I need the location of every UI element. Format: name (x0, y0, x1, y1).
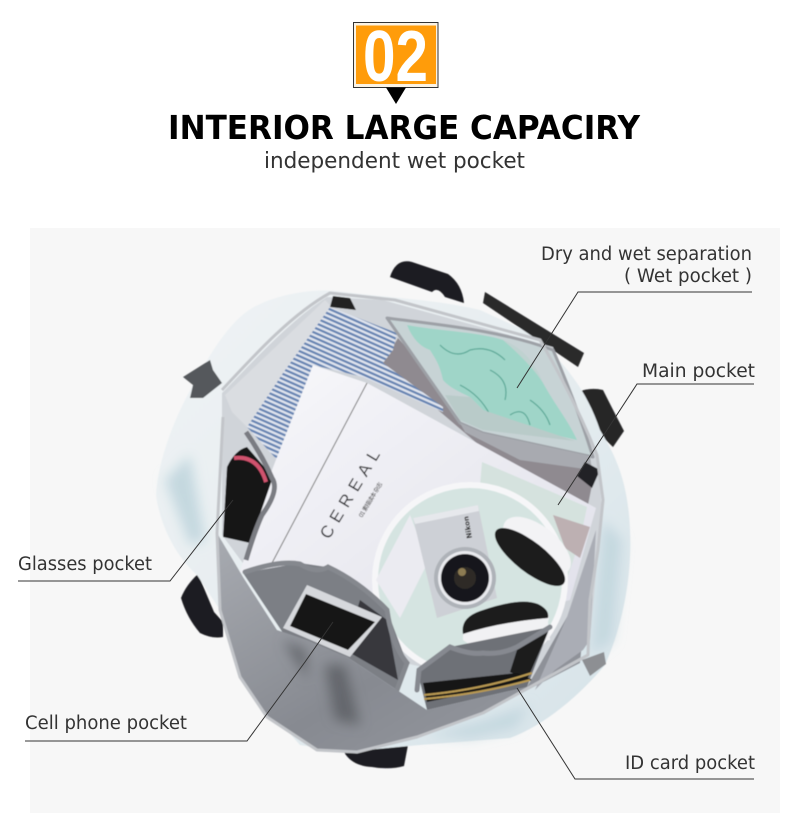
lining highlight (225, 300, 335, 428)
badge: section number 02: 02 (363, 17, 428, 97)
magazine: CEREAL (240, 365, 596, 640)
title: INTERIOR LARGE CAPACIRY (168, 109, 640, 147)
ID card pocket (417, 627, 550, 710)
label: cell phone pocket: Cell phone pocket (25, 713, 187, 734)
handle: left (181, 574, 223, 638)
bag inner lining (222, 297, 602, 690)
flap shadows (283, 640, 360, 725)
panel: photo background (30, 228, 780, 813)
zippers (217, 293, 603, 752)
right lining (535, 530, 596, 690)
dark gap at top (330, 296, 356, 310)
wet pocket lower lip (460, 423, 592, 470)
leader: main pocket (558, 384, 754, 505)
strap: right top (483, 292, 584, 367)
towel prints (440, 345, 550, 425)
wet pocket: pale window (503, 340, 577, 440)
bag photo illustration (156, 261, 630, 768)
headphones: upper ear cup (487, 506, 581, 595)
label: glasses pocket: Glasses pocket (18, 554, 152, 575)
label: main pocket: Main pocket (642, 361, 755, 382)
camera (413, 505, 497, 618)
leader: glasses pocket (18, 500, 233, 581)
zipper pull: right bottom (582, 652, 606, 676)
label: wet pocket: ( Wet pocket ) (624, 266, 752, 287)
phone (283, 585, 382, 657)
wet pocket: zipper pull (577, 462, 600, 488)
handle: top (390, 261, 464, 303)
magazine: CEREAL: 01 素描读本 杂志 (357, 481, 384, 519)
headphones: band and disc (375, 485, 565, 675)
bag outer shell (156, 291, 630, 752)
front lining flap (217, 533, 583, 752)
label: ID card pocket: ID card pocket (625, 753, 755, 774)
camera: Nikon (462, 515, 474, 539)
wet pocket: towel (407, 325, 577, 440)
leader: dry and wet separation (517, 292, 752, 388)
handle: bottom (344, 745, 408, 768)
lining: mauve area behind wet pocket (383, 338, 595, 520)
clothing: striped shirt (247, 307, 443, 463)
glasses pocket (223, 432, 274, 560)
subtitle: independent wet pocket (264, 148, 525, 174)
holographic sheen (165, 455, 622, 738)
handle: right (578, 389, 624, 447)
phone pocket (243, 563, 407, 690)
magazine: CEREAL: CEREAL (316, 447, 384, 542)
leader: cell phone pocket (25, 622, 333, 741)
label: dry and wet separation: Dry and wet separation (541, 244, 752, 265)
leader: ID card pocket (517, 688, 754, 779)
zipper pull: left (183, 360, 222, 398)
wet pocket (387, 318, 593, 470)
headphones: lower ear cup (463, 602, 550, 646)
